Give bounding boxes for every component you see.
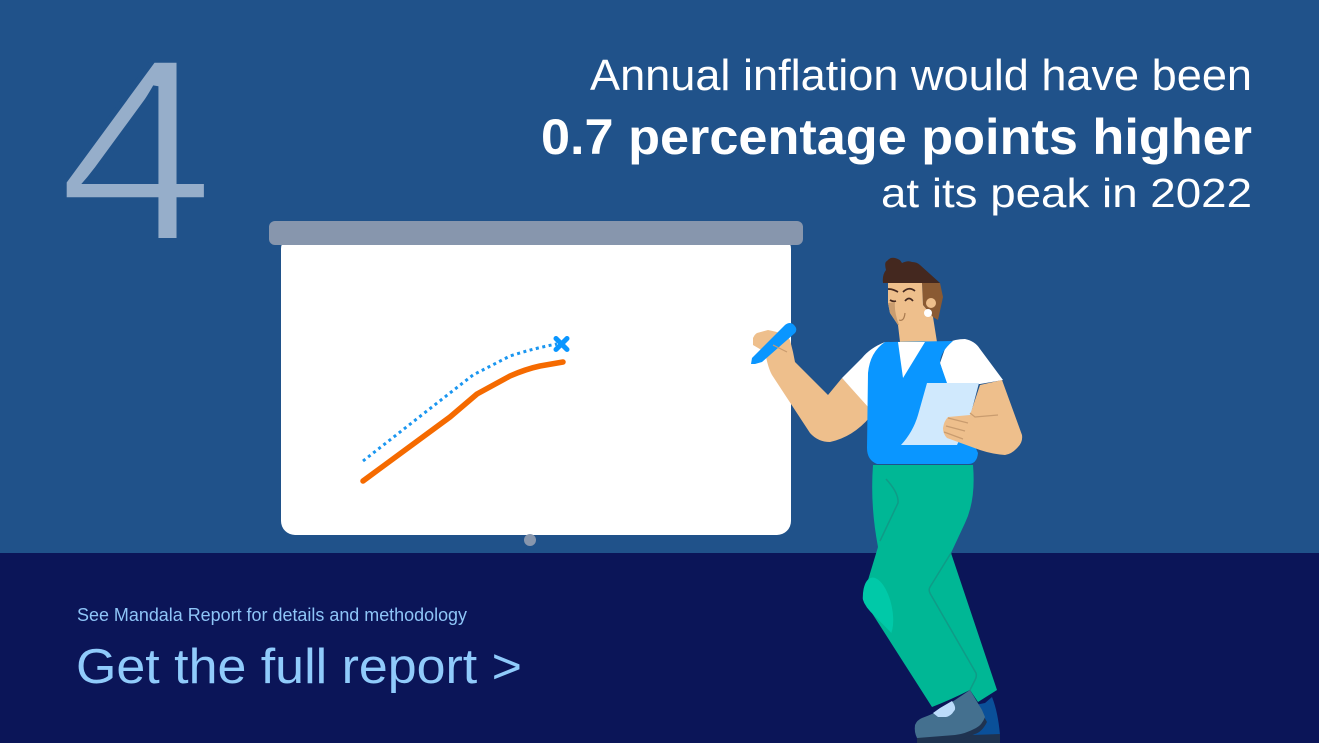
big number 4: 4: [58, 3, 215, 296]
facial features: [888, 289, 915, 301]
clipboard paper: [901, 383, 979, 445]
shirt sleeves: [842, 339, 1003, 408]
face shadow: [888, 302, 899, 325]
presenter figure: [751, 258, 1022, 743]
pen: [751, 323, 796, 364]
footer note: See Mandala Report for details and methodology: [77, 605, 467, 625]
call to action link: Get the full report >: [76, 640, 522, 694]
line chart: blue dotted counterfactual line: [363, 344, 557, 461]
headline: 0.7 percentage points higher: [541, 109, 1252, 165]
trousers: [858, 465, 997, 707]
fingers: [944, 413, 998, 439]
x marker at peak: [556, 338, 567, 350]
ear and earring: [926, 298, 936, 308]
hair: [883, 258, 940, 283]
line chart: orange actual line: [363, 362, 563, 481]
headline: [541, 51, 1252, 216]
blue vest: [867, 341, 978, 464]
left arm and hand: [753, 330, 870, 442]
projection screen with chart: [269, 221, 803, 546]
face and neck: [888, 283, 937, 342]
headline: at its peak in 2022: [881, 170, 1252, 216]
back shoe: [970, 697, 1000, 735]
right arm: [943, 380, 1022, 455]
back hair: [922, 283, 943, 320]
front shoe: [915, 690, 1000, 743]
headline: Annual inflation would have been: [590, 51, 1252, 100]
neck and head: [883, 258, 943, 342]
